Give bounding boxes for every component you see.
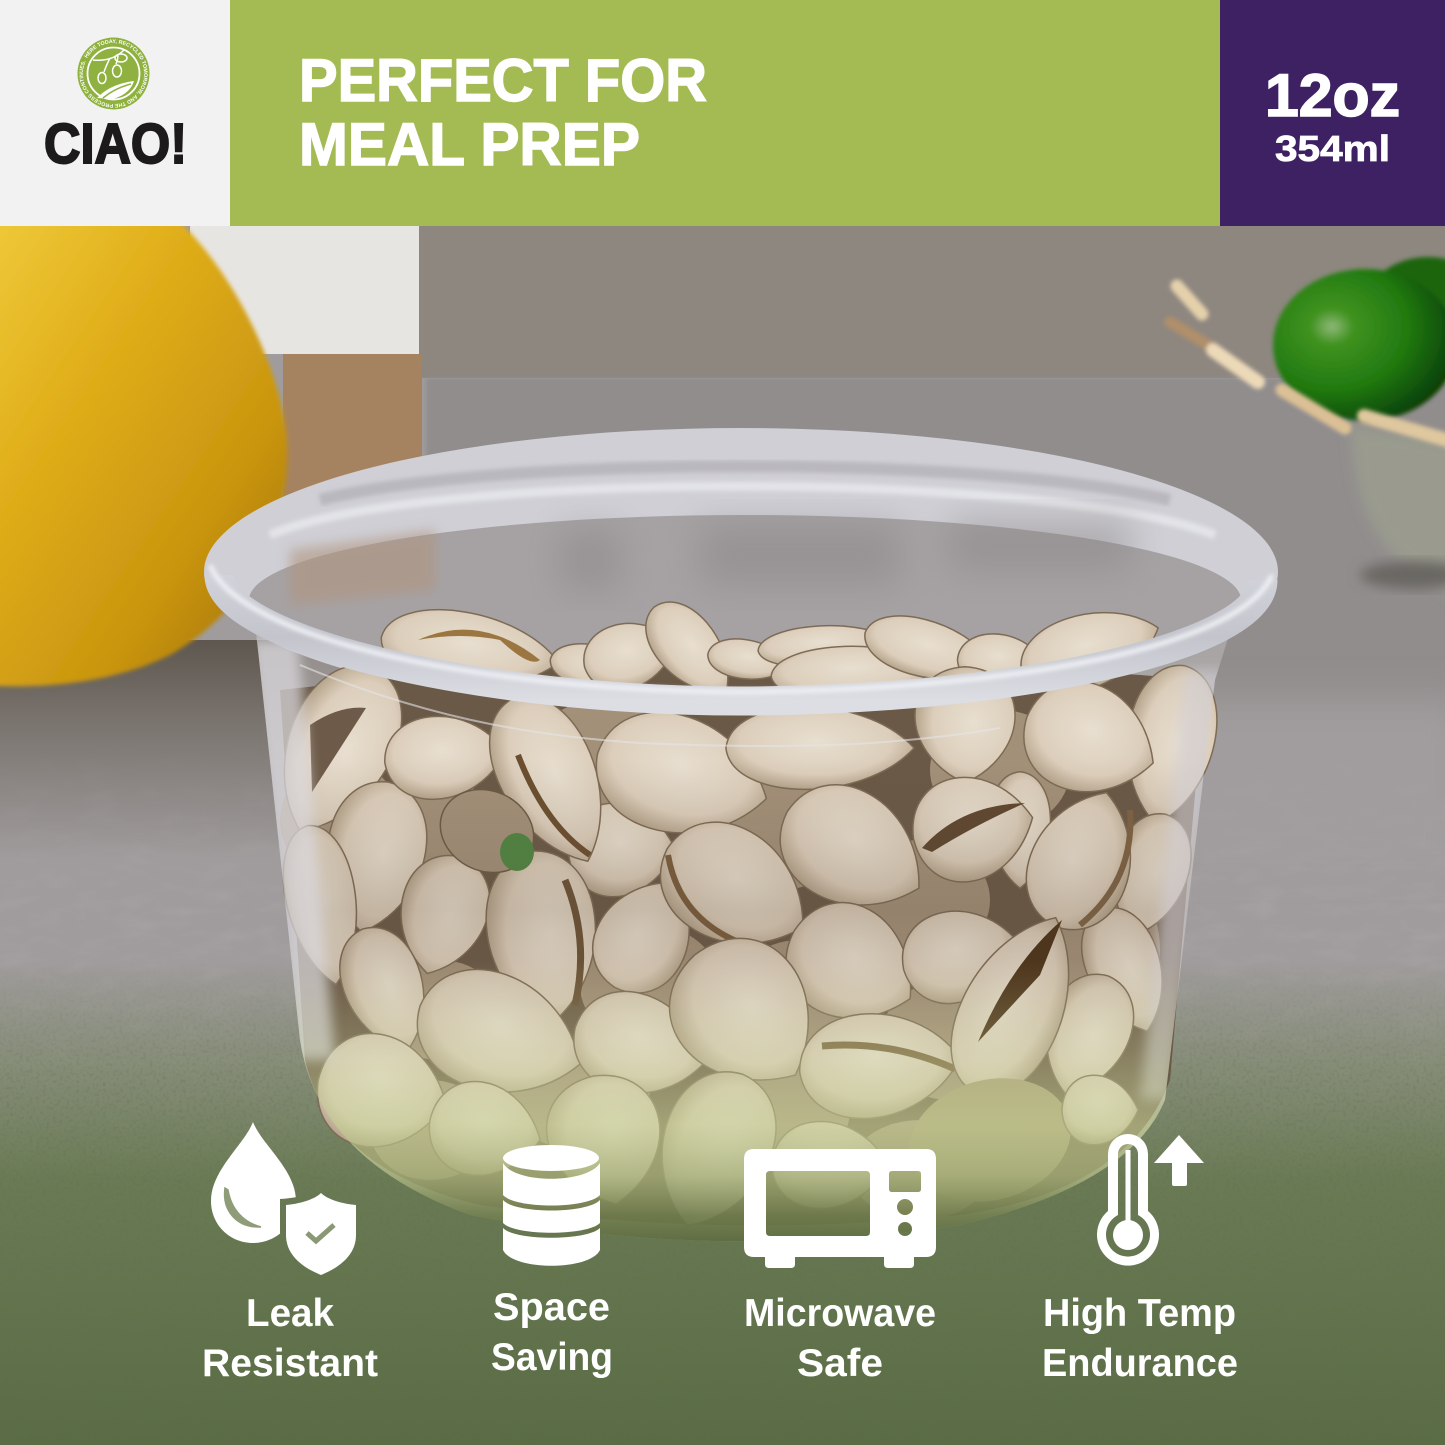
- lemon: [0, 215, 287, 686]
- container side walls: [250, 640, 335, 1060]
- metal bowl: [1170, 286, 1445, 600]
- title text: PERFECT FOR: [299, 47, 707, 114]
- label: Microwave: [744, 1292, 936, 1335]
- filler nuts in the background: [280, 700, 1160, 1220]
- counter: [426, 378, 1445, 798]
- feature: high temp endurance: [1042, 1134, 1238, 1385]
- icon: microwave: [744, 1149, 936, 1268]
- counter shadow: [0, 640, 430, 860]
- back wall: [400, 226, 1445, 378]
- title text: MEAL PREP: [299, 111, 640, 178]
- label: [491, 1286, 613, 1379]
- title banner: [230, 0, 1220, 226]
- pistachios: [253, 588, 1227, 1244]
- logo wordmark: CIAO!: [44, 112, 187, 176]
- label: Space: [493, 1286, 610, 1329]
- label: Endurance: [1042, 1342, 1238, 1385]
- size badge: 12oz: [1265, 62, 1400, 129]
- logo panel: [0, 0, 230, 226]
- size badge: 354ml: [1275, 128, 1390, 169]
- label: [202, 1292, 378, 1385]
- cardboard box: [283, 354, 422, 604]
- feature: leak resistant: [202, 1122, 378, 1385]
- rim back band: [204, 428, 1278, 716]
- feature: microwave safe: [744, 1149, 936, 1385]
- logo emblem: HERE TODAY, RECYCLED TOMORROW, AND THE PROCESS CONTINUES.: [79, 39, 148, 108]
- label: [744, 1292, 936, 1385]
- feature: space saving: [491, 1145, 613, 1379]
- white box: [190, 226, 419, 354]
- icon: water drop and shield: [211, 1122, 356, 1275]
- green overlay on counter: [0, 960, 1445, 1445]
- title text: [299, 47, 707, 178]
- label: High Temp: [1043, 1292, 1236, 1335]
- shading over the nuts: [250, 640, 1250, 1260]
- label: Resistant: [202, 1342, 378, 1385]
- label: Saving: [491, 1336, 613, 1379]
- container with pistachios: [204, 428, 1278, 1260]
- size badge: [1220, 0, 1445, 226]
- container front rim: [210, 565, 1272, 746]
- shadowed gaps between nuts: [280, 662, 1205, 1225]
- label: [1042, 1292, 1238, 1385]
- container body: [252, 600, 1240, 1241]
- icon: stacked containers: [503, 1145, 600, 1266]
- icon: thermometer with arrow: [1097, 1134, 1204, 1266]
- label: Leak: [246, 1292, 334, 1335]
- label: Safe: [797, 1342, 883, 1385]
- container interior: [249, 515, 1241, 685]
- lime: [1273, 257, 1445, 421]
